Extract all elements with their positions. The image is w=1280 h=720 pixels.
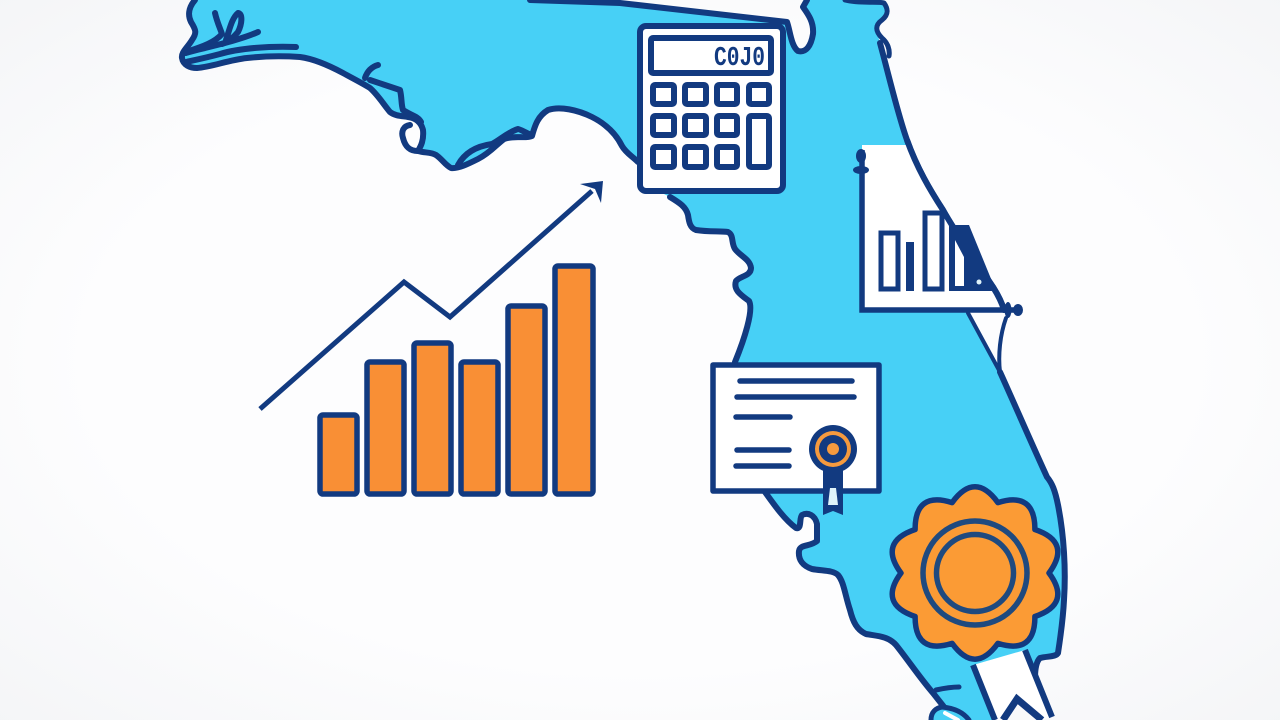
bar chart with rising trend arrow — [260, 181, 603, 494]
southern tip and keys — [931, 687, 969, 720]
panhandle coast details — [183, 13, 532, 165]
scalloped seal — [892, 487, 1058, 659]
award rosette badge — [892, 487, 1058, 720]
small bar chart panel — [853, 140, 1023, 318]
calculator icon — [640, 26, 783, 191]
badge ribbon — [973, 650, 1052, 720]
chart axes — [853, 149, 1023, 318]
certificate seal — [809, 425, 857, 473]
certificate ribbon — [823, 465, 843, 515]
chart bars — [881, 213, 996, 291]
calculator keys — [653, 85, 769, 167]
certificate icon — [713, 365, 879, 515]
map of Florida — [182, 0, 1065, 720]
calculator screen — [651, 38, 771, 74]
trend arrow — [260, 181, 603, 409]
orange bars — [320, 266, 593, 494]
concentric rings — [923, 521, 1027, 625]
calculator screen: C0J0 — [714, 44, 765, 74]
certificate text lines — [736, 381, 854, 466]
